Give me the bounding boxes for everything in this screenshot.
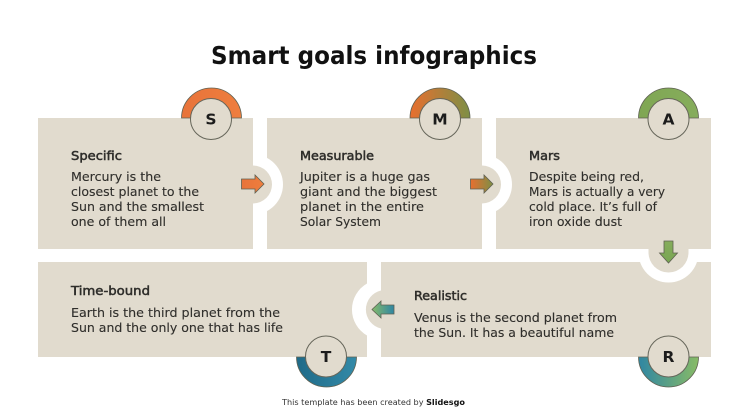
text: specific description: one of them all [71,215,166,229]
arrow: right orange to olive [470,175,493,193]
text: specific description: Mercury is the [71,170,161,184]
panel: measurable [267,88,482,249]
text: mars description [529,170,665,229]
panel: specific [38,88,253,249]
arrow: right orange [242,175,264,193]
heading: mars: Mars [529,149,560,163]
text: specific description [71,170,204,229]
text: realistic description: Venus is the second planet from [414,311,617,325]
icon: S badge [182,88,242,140]
icon: R badge: R [663,348,675,366]
connector: measurable to mars [470,154,512,214]
icon: T badge [296,336,356,387]
panel: mars [496,88,711,249]
icon: R badge [638,336,698,387]
text: realistic description: the Sun. It has a beautiful name [414,326,614,340]
text: measurable description: giant and the biggest [300,185,437,199]
icon: M badge [410,88,470,140]
text: measurable description [299,170,437,229]
text: measurable description: planet in the entire [300,200,424,214]
icon: M badge: M [432,110,448,128]
connector: mars to realistic [638,241,698,282]
heading: realistic: Realistic [414,289,467,303]
text: time-bound description: Earth is the third planet from the [71,306,280,320]
text: measurable description: Solar System [300,215,381,229]
heading: measurable: Measurable [300,149,374,163]
text: specific description: Sun and the smallest [71,200,204,214]
icon: A badge [638,88,698,140]
panel: time-bound [38,262,367,387]
text: mars description: cold place. It’s full of [529,200,658,214]
text: mars description: iron oxide dust [529,215,622,229]
heading: time-bound: Time-bound [70,284,150,298]
text: mars description: Despite being red, [529,170,644,184]
title: Smart goals infographics [211,41,537,70]
icon: S badge: S [205,110,217,128]
footer credit: This template has been created by Slidesgo [281,398,466,407]
text: mars description: Mars is actually a very [529,185,665,199]
panel: realistic [381,262,711,387]
text: time-bound description [71,306,283,335]
connector: realistic to time-bound [352,280,394,340]
arrow: left green to teal [372,301,394,318]
text: time-bound description: Sun and the only one that has life [71,321,283,335]
text: realistic description [414,311,617,340]
icon: A badge: A [662,110,674,128]
arrow: down green [660,241,678,263]
text: measurable description: Jupiter is a huge gas [299,170,430,184]
icon: T badge: T [321,348,332,366]
text: specific description: closest planet to the [71,185,199,199]
heading: specific: Specific [71,149,122,163]
connector: specific to measurable [242,154,283,214]
